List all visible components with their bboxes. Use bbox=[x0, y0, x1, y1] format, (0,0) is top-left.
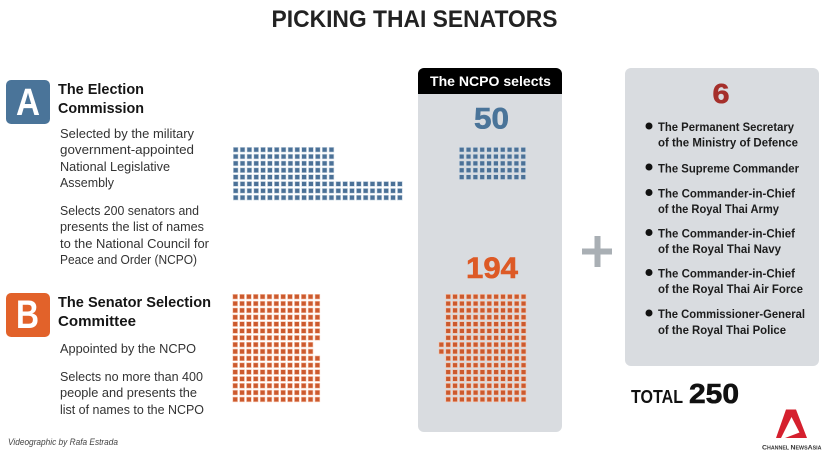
chart: 150 blue squares remaining bbox=[233, 150, 403, 198]
chart: 194 orange squares bbox=[439, 297, 526, 399]
text: what the commission does: presents the list of names bbox=[60, 220, 204, 234]
list item: Police bbox=[646, 309, 805, 337]
list item: Army bbox=[646, 188, 795, 216]
list item: Supreme Commander: The Supreme Commander bbox=[658, 164, 800, 176]
heading: The Election Commission bbox=[58, 81, 144, 117]
number: 194: 194 bbox=[466, 252, 518, 285]
text: what the commission does: Selects 200 senators and bbox=[60, 204, 199, 218]
logo: Channel NewsAsia bbox=[762, 410, 822, 452]
title: PICKING THAI SENATORS bbox=[272, 6, 558, 33]
panel: B The Senator Selection Committee bbox=[6, 293, 211, 417]
total: 250: 250 bbox=[689, 378, 739, 409]
list item: Air Force: of the Royal Thai Air Force bbox=[658, 284, 803, 296]
header bar bbox=[418, 68, 562, 94]
icon: plus bbox=[582, 236, 612, 267]
list item: Army: of the Royal Thai Army bbox=[658, 204, 780, 216]
text: what the commission does bbox=[60, 204, 209, 267]
heading: The Election Commission: Commission bbox=[58, 100, 144, 117]
logo: Channel NewsAsia: CHANNEL NEWSASIA bbox=[762, 444, 822, 452]
heading: The Election Commission: The Election bbox=[58, 81, 144, 98]
list item: Police: The Commissioner-General bbox=[658, 309, 805, 321]
icon: B badge: B bbox=[16, 293, 39, 337]
chart: 50 blue squares bbox=[459, 150, 526, 177]
panel: A The Election Commission bbox=[6, 80, 209, 267]
text: how the commission is selected: Assembly bbox=[60, 176, 115, 190]
chart: 206 orange squares remaining bbox=[232, 297, 320, 399]
icon: B badge bbox=[6, 293, 50, 337]
heading: The Senator Selection Committee bbox=[58, 294, 211, 330]
list item: Navy bbox=[646, 228, 795, 256]
number: 50: 50 bbox=[474, 102, 509, 136]
text: how the commission is selected: National Legislative bbox=[60, 160, 170, 174]
list item: Army: The Commander-in-Chief bbox=[658, 188, 795, 200]
heading: The Senator Selection Committee: The Senator Selection bbox=[58, 294, 211, 311]
text: what the commission does: Peace and Order (NCPO) bbox=[60, 253, 197, 267]
credit: Videographic by Rafa Estrada bbox=[8, 437, 118, 447]
number: 6: 6 bbox=[712, 78, 730, 109]
list item: Permanent Secretary bbox=[646, 122, 798, 150]
text: what the committee does bbox=[60, 370, 204, 417]
text: what the committee does: Selects no more than 400 bbox=[60, 370, 203, 384]
icon: A badge bbox=[6, 80, 50, 124]
icon: A badge: A bbox=[16, 82, 40, 124]
total: 250: TOTAL bbox=[631, 387, 683, 407]
list item: Air Force: The Commander-in-Chief bbox=[658, 268, 795, 280]
list item: Permanent Secretary: The Permanent Secretary bbox=[658, 122, 795, 134]
total: 250 bbox=[631, 378, 739, 409]
text: what the commission does: to the National Council for bbox=[60, 237, 209, 251]
text: appointed by: Appointed by the NCPO bbox=[60, 342, 196, 356]
text: what the committee does: people and presents the bbox=[60, 386, 197, 400]
panel: the NCPO selects bbox=[418, 68, 562, 432]
text: how the commission is selected bbox=[60, 127, 195, 190]
text: what the committee does: list of names to the NCPO bbox=[60, 403, 204, 417]
list item: Police: of the Royal Thai Police bbox=[658, 325, 786, 337]
heading: The Senator Selection Committee: Committee bbox=[58, 313, 136, 330]
text: how the commission is selected: government-appointed bbox=[60, 143, 194, 157]
text: how the commission is selected: Selected by the military bbox=[60, 127, 195, 141]
list item: Permanent Secretary: of the Ministry of Defence bbox=[658, 138, 798, 150]
panel: the 6 appointed commanders bbox=[625, 68, 819, 366]
header bar: The NCPO selects bbox=[430, 73, 551, 89]
list item: Navy: of the Royal Thai Navy bbox=[658, 244, 782, 256]
list item: Air Force bbox=[646, 268, 803, 296]
list item: Navy: The Commander-in-Chief bbox=[658, 228, 795, 240]
